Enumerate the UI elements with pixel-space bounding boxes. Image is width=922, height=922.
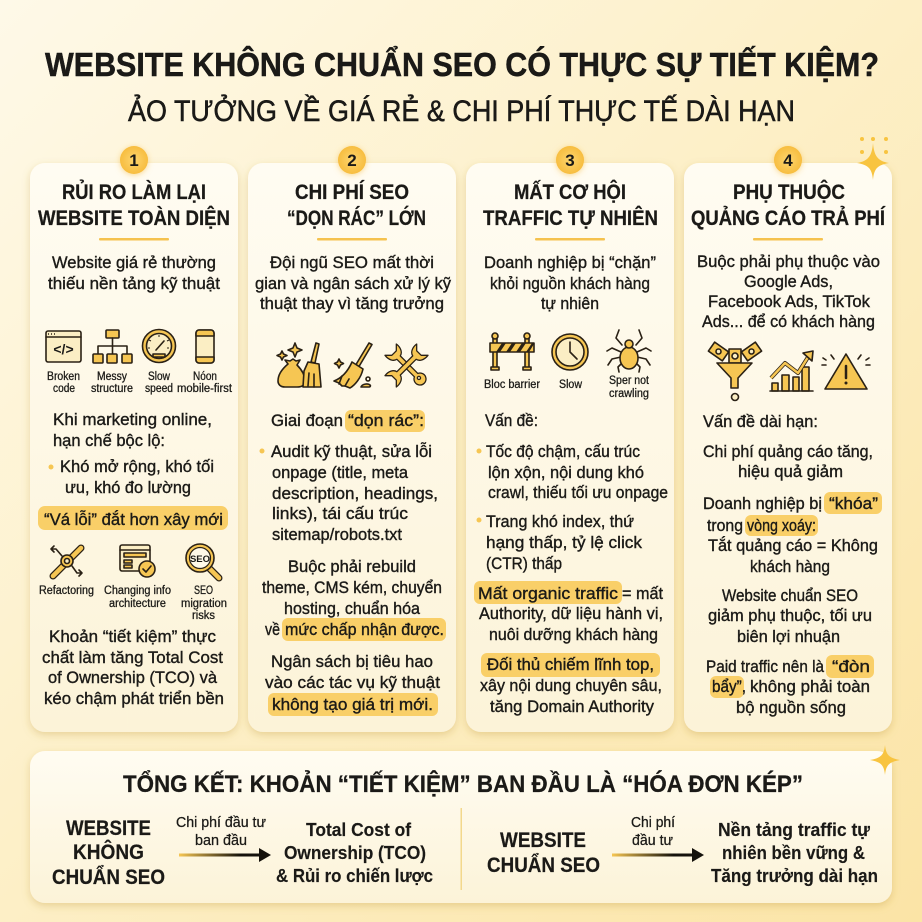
text: locked in loop: Tắt quảng cáo = Không <box>708 536 878 555</box>
heading 3 <box>483 180 658 240</box>
icon labels row 2: architecture <box>109 598 166 610</box>
icon: trash bag and broom <box>277 343 321 387</box>
intro text 4: Facebook Ads, TikTok <box>708 292 870 311</box>
icon labels row 1: Messy <box>97 371 127 383</box>
label: investment: Chi phí <box>631 814 676 831</box>
icon labels row 2: Refactoring <box>39 585 94 597</box>
icon labels row 1: mobile-first <box>177 383 233 395</box>
text: locked in loop: vòng xoáy: <box>747 516 816 535</box>
text: marketing online: Khi marketing online, <box>53 410 212 429</box>
text: competitors take top: tăng Domain Authority <box>490 697 654 716</box>
panel: summary <box>30 751 892 903</box>
bullet: technical audit: links), tái cấu trúc <box>272 504 409 523</box>
text: long term problem <box>703 412 873 481</box>
text: standard site reduces dependence <box>708 586 872 646</box>
icon: SEO magnifier <box>186 544 219 578</box>
text: competitors take top: xây nội dung chuyên sâu, <box>480 676 662 695</box>
icon: spider <box>607 330 651 372</box>
text: sustainable growth <box>711 820 878 886</box>
badge 3 <box>556 146 584 174</box>
panel: card 3 <box>466 146 674 732</box>
heading 3: TRAFFIC TỰ NHIÊN <box>483 206 658 230</box>
text: sustainable growth: nhiên bền vững & <box>722 843 865 863</box>
heading 2 <box>287 181 426 240</box>
icon labels card 3: crawling <box>609 388 649 400</box>
text: paid traffic as leverage: bẩy”, <box>712 677 746 696</box>
intro text 4: Google Ads, <box>744 272 833 291</box>
icon labels row 1: Broken <box>47 371 80 383</box>
callout: patching costs more: “Vá lỗi” đắt hơn xây mới <box>44 510 223 529</box>
intro text 1 <box>48 253 220 293</box>
icon: broken code <box>46 331 81 362</box>
badge 2: 2 <box>347 151 357 170</box>
heading 4 <box>691 180 886 240</box>
text: competitors take top <box>480 653 662 716</box>
text: forced rebuild: hosting, chuẩn hóa <box>284 599 421 618</box>
text: forced rebuild <box>262 557 446 641</box>
text: TCO conclusion: chất làm tăng Total Cost <box>42 648 223 667</box>
heading 4: PHỤ THUỘC <box>733 180 845 204</box>
icon: clock <box>552 334 588 370</box>
text: cleanup stage: Giai đoạn <box>271 411 343 430</box>
label: standard website: WEBSITE <box>500 829 586 852</box>
label: initial investment: ban đầu <box>195 832 247 849</box>
text: forced rebuild: Buộc phải rebuild <box>288 557 416 576</box>
bullet: hard to index <box>476 512 643 573</box>
icon labels row 1: Nóon <box>193 371 217 383</box>
text: standard site reduces dependence: giảm phụ thuộc, tối ưu <box>708 606 872 625</box>
text: lost organic traffic: Authority, dữ liệu hành vi, <box>479 604 663 623</box>
icon labels row 2: SEO <box>194 585 213 597</box>
intro text 4: Ads... để có khách hàng <box>702 312 875 331</box>
bullet: hard to index: (CTR) thấp <box>486 554 562 573</box>
intro text 3: Doanh nghiệp bị “chặn” <box>484 253 656 272</box>
intro text 2: gian và ngân sách xử lý kỹ <box>255 274 451 293</box>
text: standard site reduces dependence: biên lợi nhuận <box>737 627 840 646</box>
text: locked in loop: Doanh nghiệp bị <box>703 494 822 513</box>
text: long term problem: Vấn đề dài hạn: <box>703 412 818 431</box>
label: initial investment: Chi phí đầu tư <box>176 814 266 831</box>
bullet: technical audit: sitemap/robots.txt <box>272 525 402 544</box>
panel: card 2 <box>248 146 456 732</box>
icon: road barrier <box>490 333 534 370</box>
text: lost organic traffic <box>474 581 663 644</box>
text: long term problem: Chi phí quảng cáo tăng, <box>703 442 873 461</box>
panel: card 1 <box>30 146 238 732</box>
badge 1 <box>120 146 148 174</box>
heading 2: CHI PHÍ SEO <box>295 181 409 204</box>
icon: broken code: </> <box>53 341 74 357</box>
bullet: slow speed: lộn xộn, nội dung khó <box>488 463 644 482</box>
heading 1 <box>38 180 230 240</box>
text: paid traffic as leverage: bộ nguồn sống <box>736 698 846 717</box>
intro text 2: Đội ngũ SEO mất thời <box>270 253 434 272</box>
bullet: hard to scale: ưu, khó đo lường <box>65 478 191 497</box>
text: cleanup stage <box>271 410 425 432</box>
icon labels row 2 <box>39 585 227 622</box>
text: sustainable growth: Nền tảng traffic tự <box>718 820 871 840</box>
intro text 2: thuật thay vì tăng trưởng <box>260 294 444 313</box>
text: locked in loop: khách hàng <box>750 557 830 576</box>
icon: changing info architecture <box>120 545 155 577</box>
summary heading: TỔNG KẾT: KHOẢN “TIẾT KIỆM” BAN ĐẦU LÀ “HÓA ĐƠN KÉP” <box>123 769 803 798</box>
heading 1: WEBSITE TOÀN DIỆN <box>38 206 230 230</box>
bullet: hard to scale <box>48 457 214 497</box>
bullet: technical audit <box>260 442 438 544</box>
bullet: slow speed: Tốc độ chậm, cấu trúc <box>486 442 640 461</box>
bullet: slow speed: crawl, thiếu tối ưu onpage <box>488 483 668 502</box>
icon: warning triangle <box>822 354 870 389</box>
heading 1: RỦI RO LÀM LẠI <box>62 180 206 204</box>
text: TCO conclusion <box>42 627 224 708</box>
icon: sparkle top right <box>857 137 889 180</box>
text: lost organic traffic: Mất organic traffic <box>478 584 619 603</box>
text: paid traffic as leverage: không phải toàn <box>750 677 870 696</box>
icon labels card 3: Slow <box>559 379 583 391</box>
text: forced rebuild: mức chấp nhận được. <box>285 620 444 639</box>
badge 2 <box>338 146 366 174</box>
text: wasted budget: không tạo giá trị mới. <box>272 695 433 714</box>
icon labels card 3: Sper not <box>609 375 650 387</box>
arrow: right <box>612 848 704 862</box>
icon: SEO magnifier: SEO <box>190 554 210 565</box>
text: total cost of ownership: & Rủi ro chiến lược <box>276 866 433 886</box>
text: sustainable growth: Tăng trưởng dài hạn <box>711 866 878 886</box>
text: locked in loop: “khóa” <box>829 494 878 513</box>
bullet: slow speed <box>476 442 668 502</box>
icon labels row 1 <box>47 371 233 395</box>
icon: money funnel <box>708 342 762 400</box>
icon labels row 1: structure <box>91 383 133 395</box>
text: TCO conclusion: kéo chậm phát triển bền <box>44 689 224 708</box>
label: non-standard website <box>52 817 165 889</box>
text: problem label: Vấn đề: <box>485 411 538 430</box>
panel: card 4 <box>684 146 892 732</box>
text: wasted budget: Ngân sách bị tiêu hao <box>271 652 433 671</box>
badge 4: 4 <box>783 151 793 170</box>
icon labels row 2: migration <box>181 598 227 610</box>
text: forced rebuild: theme, CMS kém, chuyển <box>262 578 442 597</box>
icon: growth chart <box>770 351 813 391</box>
icon: slow speed gauge <box>142 330 176 362</box>
intro text 2 <box>255 253 451 313</box>
icon: sparkle bottom right <box>870 745 900 775</box>
text: TCO conclusion: of Ownership (TCO) và <box>48 668 218 687</box>
label: standard website: CHUẨN SEO <box>487 854 600 877</box>
intro text 4: Buộc phải phụ thuộc vào <box>697 252 880 271</box>
bullet: technical audit: description, headings, <box>272 484 438 503</box>
text: long term problem: hiệu quả giảm <box>738 462 843 481</box>
text: locked in loop <box>703 492 882 576</box>
label: non-standard website: KHÔNG <box>73 840 144 864</box>
text: lost organic traffic: nuôi dưỡng khách hàng <box>489 625 658 644</box>
icon: messy structure <box>93 330 132 363</box>
text: total cost of ownership: Total Cost of <box>306 820 412 840</box>
text: total cost of ownership <box>276 820 433 886</box>
icon: refactoring <box>51 546 82 576</box>
icon labels row 1: Slow <box>148 371 171 383</box>
label: non-standard website: WEBSITE <box>66 817 151 840</box>
intro text 3: tự nhiên <box>541 294 599 313</box>
heading 3: MẤT CƠ HỘI <box>514 180 626 204</box>
badge 4 <box>774 146 802 174</box>
arrow: left <box>179 848 271 862</box>
icon labels row 2: Changing info <box>104 585 171 597</box>
text: total cost of ownership: Ownership (TCO) <box>284 843 426 863</box>
text: lost organic traffic: = mất <box>622 584 663 603</box>
icon labels row 2: risks <box>192 610 215 622</box>
intro text 1: thiếu nền tảng kỹ thuật <box>48 274 220 293</box>
subtitle: ẢO TƯỞNG VỀ GIÁ RẺ & CHI PHÍ THỰC TẾ DÀI HẠN <box>128 94 795 128</box>
bullet: hard to scale: Khó mở rộng, khó tối <box>60 457 214 476</box>
title: WEBSITE KHÔNG CHUẨN SEO CÓ THỰC SỰ TIẾT KIỆM? <box>45 45 879 83</box>
text: wasted budget: vào các tác vụ kỹ thuật <box>265 673 440 692</box>
text: forced rebuild: về <box>265 620 280 639</box>
text: paid traffic as leverage: “đòn <box>832 657 870 676</box>
badge 3: 3 <box>565 151 575 170</box>
icon labels row 1: speed <box>145 383 173 395</box>
intro text 1: Website giá rẻ thường <box>52 253 216 272</box>
label: investment <box>631 814 676 849</box>
bullet: hard to index: hạng thấp, tỷ lệ click <box>486 533 643 552</box>
label: initial investment <box>176 814 266 849</box>
text: locked in loop: trong <box>707 516 743 535</box>
text: paid traffic as leverage <box>706 655 874 717</box>
text: TCO conclusion: Khoản “tiết kiệm” thực <box>49 627 216 646</box>
icon: crossed wrenches <box>385 344 430 389</box>
text: paid traffic as leverage: Paid traffic nên là <box>706 657 824 676</box>
icon: phone <box>196 330 214 363</box>
badge 1: 1 <box>129 151 139 170</box>
heading 2: “DỌN RÁC” LỚN <box>287 206 426 230</box>
intro text 4 <box>697 252 880 331</box>
bullet: technical audit: Audit kỹ thuật, sửa lỗi <box>271 442 432 461</box>
icon labels card 3 <box>484 375 650 400</box>
text: wasted budget <box>265 652 440 716</box>
label: investment: đầu tư <box>632 832 673 849</box>
heading 4: QUẢNG CÁO TRẢ PHÍ <box>691 207 886 230</box>
bullet: hard to index: Trang khó index, thứ <box>486 512 634 531</box>
text: marketing online <box>53 410 212 450</box>
label: non-standard website: CHUẨN SEO <box>52 866 165 889</box>
text: marketing online: hạn chế bộc lộ: <box>53 431 165 450</box>
text: cleanup stage: “dọn rác”: <box>348 411 424 430</box>
intro text 3 <box>484 253 656 313</box>
text: competitors take top: Đối thủ chiếm lĩnh top, <box>487 655 654 674</box>
icon labels row 1: code <box>53 383 75 395</box>
bullet: technical audit: onpage (title, meta <box>272 463 409 482</box>
text: standard site reduces dependence: Website chuẩn SEO <box>722 586 858 605</box>
icon labels card 3: Bloc barrier <box>484 379 540 391</box>
label: standard website <box>487 829 600 877</box>
intro text 3: khỏi nguồn khách hàng <box>490 274 650 293</box>
icon: broom <box>334 343 372 388</box>
